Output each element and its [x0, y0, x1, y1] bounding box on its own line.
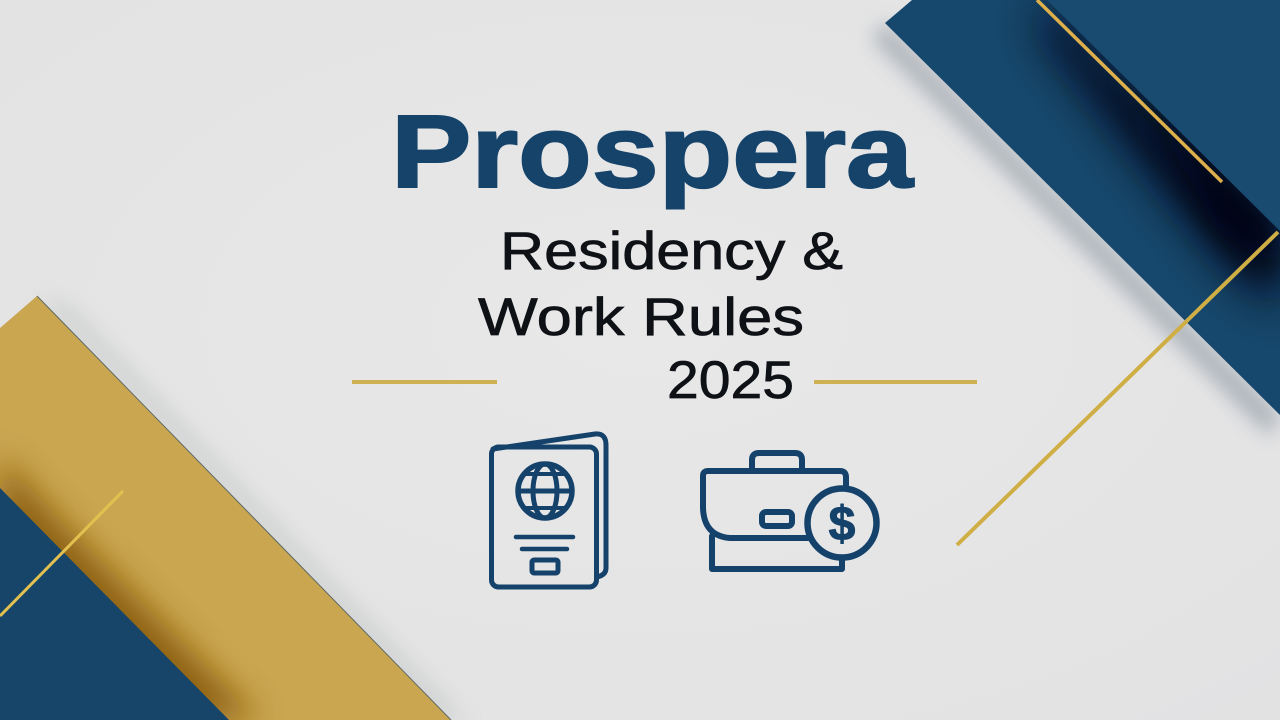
gold line on navy corner — [0, 491, 123, 616]
icon: passport — [492, 434, 606, 587]
gold line on upper band edge — [1037, 0, 1222, 182]
panel: bottom-left gold and navy bands — [0, 296, 465, 720]
band drop shadow — [872, 23, 1280, 436]
left gold rule — [352, 380, 497, 384]
navy lower band — [885, 0, 1280, 415]
icon: briefcase with dollar coin — [703, 453, 876, 569]
gold band soft shadow — [37, 296, 465, 720]
subtitle year: 2025 — [667, 351, 794, 410]
gold band inner shade — [0, 455, 260, 720]
shadow between bands — [1040, 0, 1280, 310]
dollar sign: $ — [829, 498, 856, 551]
subtitle line 2: Work Rules — [478, 288, 804, 347]
right gold rule — [814, 380, 977, 384]
title: Prospera — [391, 94, 914, 209]
navy corner — [0, 488, 229, 720]
panel: top-right navy bands — [872, 0, 1280, 436]
navy upper band — [1047, 0, 1280, 231]
gold band — [0, 296, 451, 720]
gold band edge — [37, 296, 451, 720]
subtitle line 1: Residency & — [500, 222, 843, 281]
gold diagonal line right — [957, 232, 1278, 545]
